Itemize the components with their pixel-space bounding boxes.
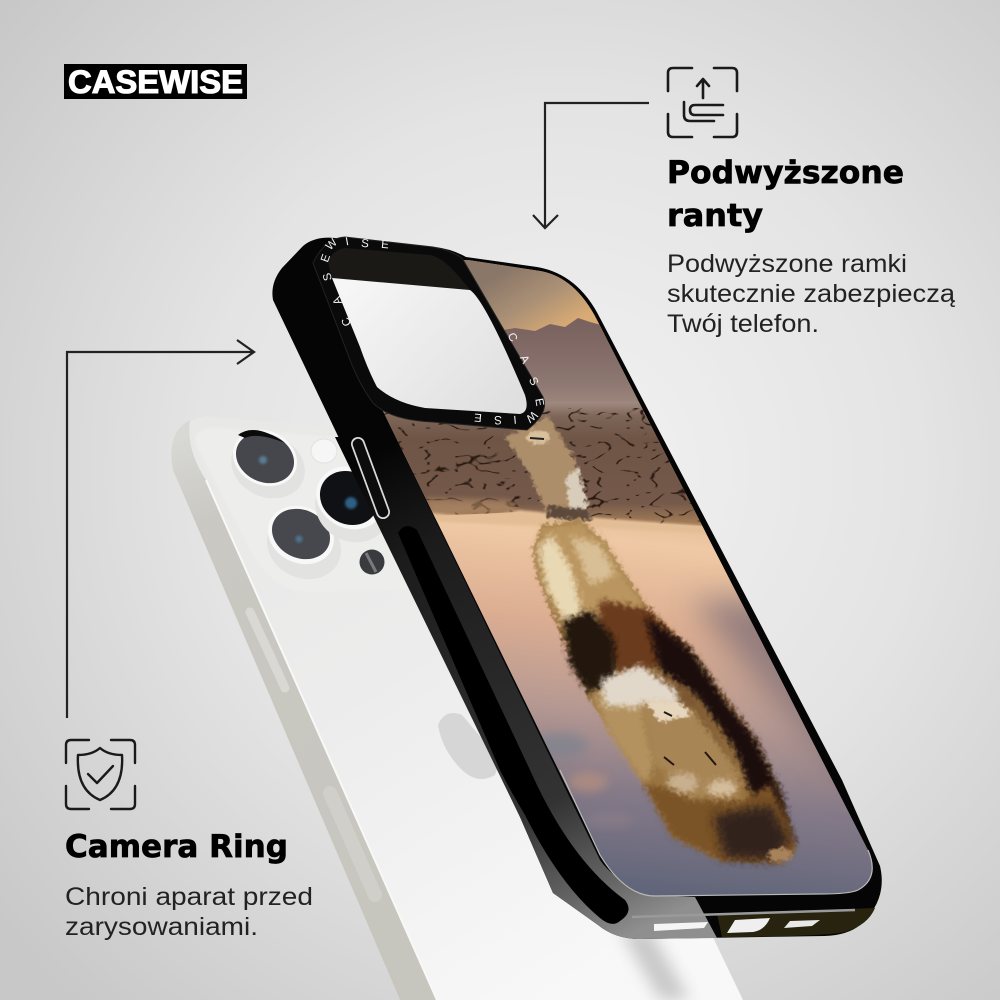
chin tuft bbox=[768, 848, 792, 862]
cream foreleg bbox=[538, 535, 582, 622]
ring frame bbox=[313, 237, 545, 430]
darker right side bbox=[684, 580, 826, 768]
ring text top: E bbox=[319, 252, 333, 264]
cub legs bbox=[566, 468, 590, 516]
brown mane lower bbox=[643, 783, 795, 863]
white chest fur bbox=[600, 665, 680, 708]
text: camera ring description: Chroni aparat przed bbox=[65, 883, 313, 911]
arrow: camera ring bbox=[67, 340, 254, 718]
ring text top bbox=[319, 236, 390, 328]
ring text top: C bbox=[340, 315, 354, 328]
ring text top: S bbox=[321, 271, 335, 282]
mane shadow bbox=[713, 805, 790, 860]
mountains bbox=[504, 318, 654, 430]
side edge highlight bbox=[206, 480, 437, 1000]
sand edge bbox=[425, 510, 725, 534]
phone body bbox=[172, 416, 743, 1000]
muzzle bbox=[645, 700, 692, 722]
text: camera ring description: zarysowaniami. bbox=[65, 913, 258, 941]
white iPhone back bbox=[171, 416, 743, 1000]
phone side edge bbox=[171, 420, 437, 1000]
ring text bottom: I bbox=[513, 413, 517, 425]
apple logo bbox=[438, 713, 500, 779]
lion reflection bbox=[533, 520, 795, 863]
port middle bbox=[727, 918, 770, 933]
paws and legs bbox=[535, 522, 645, 640]
lion face bbox=[640, 702, 740, 797]
dark mane left bbox=[563, 610, 615, 695]
lens top bbox=[220, 420, 316, 510]
lion eyes bbox=[664, 712, 716, 765]
dark mane right bbox=[645, 615, 795, 845]
logo: CASEWISE bbox=[68, 64, 243, 100]
lion cub bbox=[505, 416, 590, 520]
ring text bottom bbox=[473, 331, 546, 425]
case shell bbox=[272, 238, 882, 939]
pink cloud bbox=[568, 772, 608, 792]
cream highlight bbox=[570, 535, 615, 585]
side button bbox=[358, 444, 383, 512]
ring text bottom: S bbox=[526, 375, 540, 388]
brown fur between bbox=[652, 670, 734, 766]
cub mouth bbox=[530, 438, 544, 439]
lens bottom bbox=[256, 495, 352, 591]
ring text bottom: C bbox=[505, 331, 519, 344]
ring text top: E bbox=[381, 239, 390, 251]
ring text bottom: E bbox=[473, 411, 482, 423]
cheek right bbox=[707, 780, 737, 796]
cub paws bbox=[548, 505, 590, 520]
side slot bbox=[398, 526, 629, 924]
translucent lower side bbox=[335, 437, 717, 939]
lens right bbox=[303, 455, 401, 556]
text: raised edges description: skutecznie zabezpieczą bbox=[667, 280, 955, 308]
text: raised edges description: Twój telefon. bbox=[667, 310, 819, 338]
blue clouds bbox=[532, 733, 588, 757]
volume button lower bbox=[330, 793, 375, 895]
cub face bbox=[527, 430, 549, 444]
camera opening bbox=[332, 278, 527, 414]
ring text top: S bbox=[361, 238, 370, 250]
black case bbox=[272, 238, 882, 939]
inner wall bbox=[328, 248, 470, 290]
lit ground patch bbox=[425, 498, 520, 516]
volume button upper bbox=[250, 612, 285, 688]
cracked ground texture bbox=[384, 408, 700, 524]
cub body bbox=[505, 416, 590, 520]
ground bbox=[383, 402, 702, 526]
ring text top: W bbox=[324, 237, 340, 253]
tan side fur bbox=[590, 690, 655, 785]
icon: shield bbox=[66, 740, 135, 809]
screen edge highlight bbox=[560, 770, 872, 896]
camera ring bbox=[313, 236, 546, 430]
port right bbox=[784, 920, 820, 928]
phone screen artwork bbox=[382, 260, 872, 896]
ring text bottom: A bbox=[517, 353, 531, 366]
arrow: raised edges bbox=[533, 103, 649, 228]
ring text bottom: S bbox=[494, 413, 502, 425]
cheek left bbox=[668, 773, 698, 793]
heading: raised edges: ranty bbox=[667, 198, 763, 234]
silhouette bbox=[533, 520, 795, 863]
icon: raised edge bbox=[668, 68, 737, 137]
case shadow on phone bbox=[620, 930, 690, 1000]
port left bbox=[654, 922, 708, 931]
ring text bottom: W bbox=[523, 408, 539, 424]
sensor bbox=[360, 550, 384, 574]
flash bbox=[311, 439, 337, 463]
ring text bottom: E bbox=[532, 397, 546, 407]
desert and water gradient bbox=[382, 260, 872, 896]
heading: camera ring: Camera Ring bbox=[65, 829, 288, 865]
text: raised edges description: Podwyższone ramki bbox=[667, 250, 907, 278]
ring text top: I bbox=[345, 236, 350, 248]
brown chest bbox=[598, 600, 685, 680]
heading: raised edges: Podwyższone bbox=[667, 155, 904, 191]
bottom silver line bbox=[632, 910, 855, 917]
camera plateau bbox=[195, 428, 430, 592]
cloud lower bbox=[591, 815, 628, 826]
text: raised edges description bbox=[667, 250, 955, 338]
side button inner bbox=[358, 444, 383, 512]
port strip bbox=[717, 908, 875, 937]
heading: raised edges bbox=[667, 155, 904, 234]
ring text top: A bbox=[331, 294, 345, 306]
sky bbox=[464, 260, 605, 335]
text: camera ring description bbox=[65, 883, 313, 941]
